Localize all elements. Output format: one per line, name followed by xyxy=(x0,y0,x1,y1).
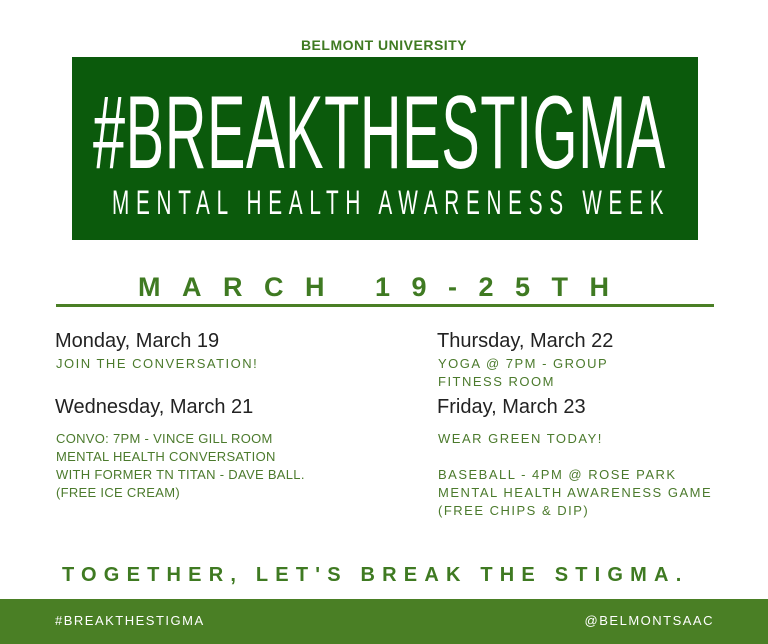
event: thursday: Thursday, March 22 xyxy=(437,330,613,352)
event: wednesday: (FREE ICE CREAM) xyxy=(56,485,180,500)
event: thursday xyxy=(437,330,613,389)
event: wednesday: Wednesday, March 21 xyxy=(55,396,253,418)
title banner xyxy=(72,57,698,240)
event: monday: JOIN THE CONVERSATION! xyxy=(56,356,258,371)
event: thursday: FITNESS ROOM xyxy=(438,374,555,389)
event: friday: BASEBALL - 4PM @ ROSE PARK xyxy=(438,467,677,482)
footer bar xyxy=(0,599,768,644)
hashtag title: #BREAKTHESTIGMA xyxy=(93,75,666,191)
event: wednesday: MENTAL HEALTH CONVERSATION xyxy=(56,449,276,464)
footer hashtag: #BREAKTHESTIGMA xyxy=(55,613,205,628)
date heading: MARCH 19-25TH xyxy=(138,272,631,302)
event: wednesday xyxy=(55,396,305,500)
event: thursday: YOGA @ 7PM - GROUP xyxy=(438,356,608,371)
event: monday: Monday, March 19 xyxy=(55,330,219,352)
subtitle: MENTAL HEALTH AWARENESS WEEK xyxy=(112,184,670,222)
event: friday: Friday, March 23 xyxy=(437,396,586,418)
event: friday: (FREE CHIPS & DIP) xyxy=(438,503,589,518)
event: monday xyxy=(55,330,258,371)
tagline: TOGETHER, LET'S BREAK THE STIGMA. xyxy=(62,564,688,586)
event: friday: WEAR GREEN TODAY! xyxy=(438,431,603,446)
event: friday: MENTAL HEALTH AWARENESS GAME xyxy=(438,485,712,500)
header: belmont university: BELMONT UNIVERSITY xyxy=(301,37,467,53)
event: friday xyxy=(437,396,712,518)
event: wednesday: WITH FORMER TN TITAN - DAVE BALL. xyxy=(56,467,305,482)
event: wednesday: CONVO: 7PM - VINCE GILL ROOM xyxy=(56,431,273,446)
footer handle: @BELMONTSAAC xyxy=(585,613,714,628)
